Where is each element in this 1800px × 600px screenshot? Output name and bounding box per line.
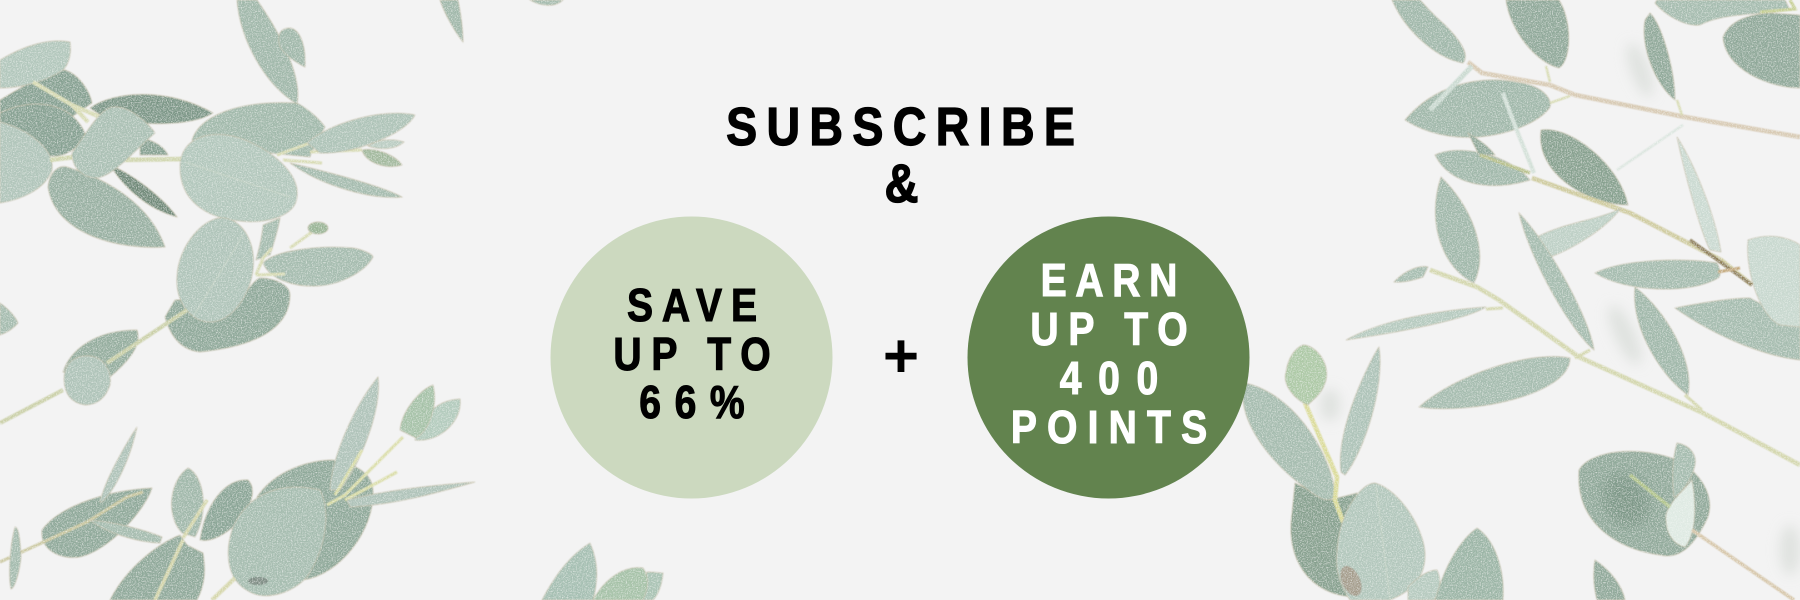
foliage: top-left branch [0,0,563,260]
heading: subscribe: SUBSCRIBE [726,97,1075,157]
text: points offer: 400 [1060,353,1158,405]
text: points offer: EARN [1041,255,1177,307]
circle panel: save up to 66% [550,216,832,498]
foliage: bottom-left branches [0,377,475,600]
foliage: bottom-center leaves [542,543,663,600]
text: save offer: 66% [639,377,745,429]
circle panel: earn up to 400 points [968,216,1250,498]
text: points offer [1011,255,1207,454]
text: points offer: UP TO [1030,304,1188,356]
foliage: bottom-right branch [1243,345,1794,600]
text: save offer: UP TO [613,329,771,381]
text: save offer [613,280,771,429]
text: save offer: SAVE [627,280,757,332]
foliage: mid-left branch [0,218,373,423]
ampersand: & [885,153,918,214]
plus sign: + [883,322,919,391]
soft leaf shadows [1320,41,1800,575]
text: points offer: POINTS [1011,402,1207,454]
foliage: top-right branch [1346,0,1800,465]
